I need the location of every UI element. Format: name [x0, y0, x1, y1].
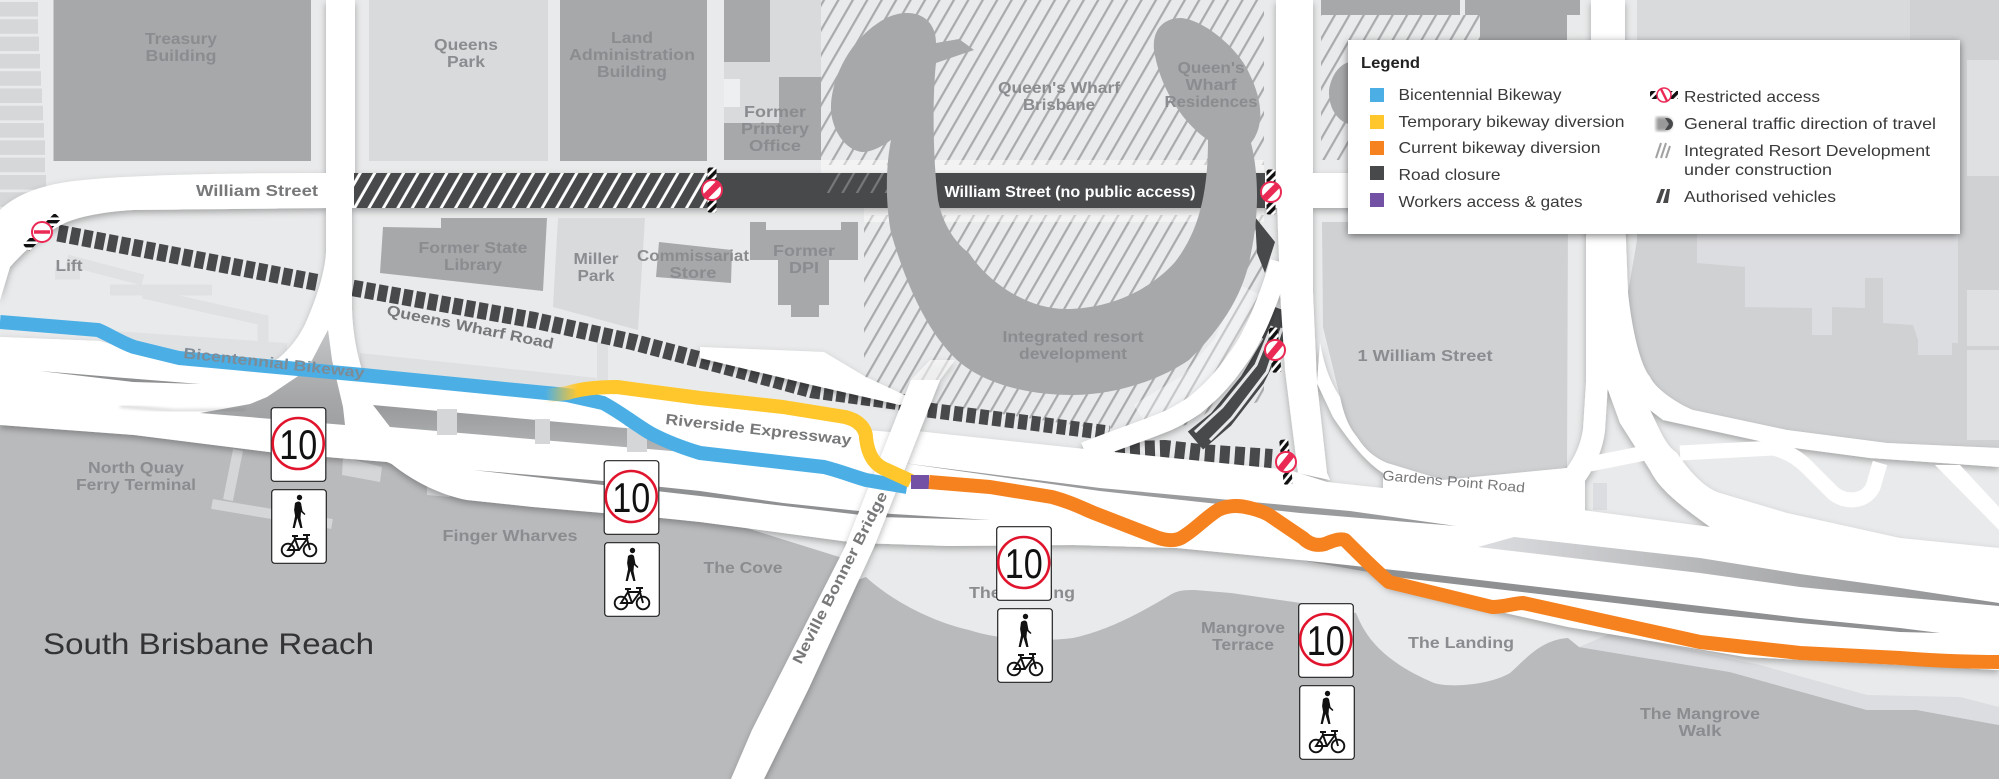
- place labels: Queen's: [1178, 60, 1245, 77]
- current diversion route: [929, 482, 1999, 662]
- place labels: Treasury: [145, 31, 217, 48]
- place labels: Former: [773, 243, 835, 260]
- place labels: Finger Wharves: [442, 528, 578, 545]
- place labels: Ferry Terminal: [76, 477, 196, 494]
- far east road and band: [1591, 0, 1999, 610]
- place labels: Administration: [569, 47, 695, 64]
- bikeway routes: [0, 322, 1999, 662]
- riverside corridor: [0, 337, 1999, 670]
- William Street east: [355, 0, 1625, 208]
- white path near bridge: [700, 347, 911, 405]
- workers access gate: [911, 475, 929, 489]
- place labels: Building: [146, 48, 216, 65]
- legend entries left: Road closure: [1398, 167, 1501, 184]
- place labels: North Quay: [88, 460, 184, 477]
- small paths on east land: [1590, 448, 1880, 500]
- place labels: The Landing: [1408, 635, 1514, 652]
- place labels: DPI: [789, 260, 819, 277]
- William Street and left ramp: [0, 0, 720, 523]
- vertical road east: [1277, 200, 1330, 480]
- legend entries right: Restricted access: [1684, 89, 1820, 106]
- place labels: William Street (no public access): [944, 184, 1196, 201]
- place labels: Store: [670, 265, 717, 282]
- legend entries left: Temporary bikeway diversion: [1398, 114, 1624, 131]
- legend entries left: Workers access & gates: [1398, 194, 1582, 211]
- shade under left ramp: [120, 406, 245, 411]
- legend entries right: under construction: [1684, 162, 1832, 179]
- lower land band: [1579, 633, 1999, 725]
- place labels: Lift: [56, 258, 83, 275]
- place labels: Printery: [741, 121, 809, 138]
- place labels: Building: [597, 64, 667, 81]
- place labels: 1 William Street: [1358, 348, 1493, 365]
- road labels: Queens Wharf Road: [385, 302, 555, 353]
- place labels: Library: [444, 257, 502, 274]
- place labels: Former State: [418, 240, 528, 257]
- building blocks: [0, 0, 1999, 510]
- hatched construction site: [821, 0, 1567, 430]
- place labels: Park: [447, 54, 485, 71]
- integrated resort building: [831, 13, 1260, 395]
- legend: [1348, 40, 1960, 234]
- legend icons: [1650, 88, 1678, 203]
- speed and shared path signs: [271, 408, 1354, 759]
- legend entries left: Bicentennial Bikeway: [1398, 87, 1562, 104]
- river: [0, 420, 1999, 779]
- curved band around 1 William Street: [1317, 343, 1585, 520]
- legend entries right: [1684, 89, 1936, 206]
- place labels: Land: [611, 30, 653, 47]
- place labels: Queen's Wharf: [998, 80, 1121, 97]
- place labels: Residences: [1164, 94, 1258, 111]
- legend entries right: Authorised vehicles: [1684, 189, 1836, 206]
- legend entries left: [1398, 87, 1624, 211]
- place labels: development: [1019, 346, 1128, 363]
- place labels: Mangrove: [1201, 620, 1285, 637]
- legend entries left: Current bikeway diversion: [1398, 140, 1600, 157]
- place labels: Queens: [434, 37, 498, 54]
- Bicentennial Bikeway route: [0, 322, 907, 487]
- legend entries right: General traffic direction of travel: [1684, 116, 1936, 133]
- speed and shared path signs: 10: [612, 474, 650, 521]
- place labels: Wharf: [1186, 77, 1237, 94]
- place labels: Commissariat: [637, 248, 750, 265]
- place labels: Park: [578, 268, 615, 285]
- place labels: [56, 30, 1760, 740]
- dark closure wedge: [1255, 217, 1275, 273]
- place labels: Brisbane: [1023, 97, 1095, 114]
- speed and shared path signs: 10: [1005, 540, 1043, 587]
- William Street closure: [354, 173, 1265, 208]
- Neville Bonner Bridge: [731, 360, 955, 779]
- legend heading: Legend: [1361, 55, 1420, 72]
- stripes: authorised vehicles lower: [58, 233, 1283, 459]
- place labels: The Cove: [704, 560, 783, 577]
- place labels: Walk: [1678, 723, 1722, 740]
- loop ramp: [1300, 200, 1597, 538]
- speed and shared path signs: 10: [1307, 617, 1345, 664]
- restricted access signs: [19, 168, 1298, 485]
- diagonal east path: [1935, 465, 1999, 530]
- temporary diversion route: [545, 387, 911, 481]
- road labels: Bicentennial Bikeway: [183, 345, 366, 382]
- pier shapes: [212, 450, 332, 524]
- road labels: Neville Bonner Bridge: [789, 489, 891, 667]
- place labels: Office: [749, 138, 801, 155]
- place labels: The Mangrove: [1640, 706, 1760, 723]
- water label: South Brisbane Reach: [43, 628, 374, 661]
- place labels: Miller: [574, 251, 618, 268]
- place labels: William Street: [196, 183, 319, 200]
- pale wharf blocks: [342, 457, 450, 497]
- place labels: Terrace: [1212, 637, 1274, 654]
- legend entries right: Integrated Resort Development: [1684, 143, 1931, 160]
- place labels: The Landing: [969, 585, 1075, 602]
- road labels: Riverside Expressway: [665, 411, 853, 449]
- speed and shared path signs: 10: [279, 421, 317, 468]
- place labels: Former: [744, 104, 806, 121]
- closed road ramp: [1085, 262, 1280, 452]
- legend swatches: [1370, 88, 1384, 207]
- road gaps: [40, 330, 1999, 633]
- road labels: [183, 302, 1526, 667]
- place labels: Integrated resort: [1002, 329, 1144, 346]
- road labels: Gardens Point Road: [1382, 467, 1526, 495]
